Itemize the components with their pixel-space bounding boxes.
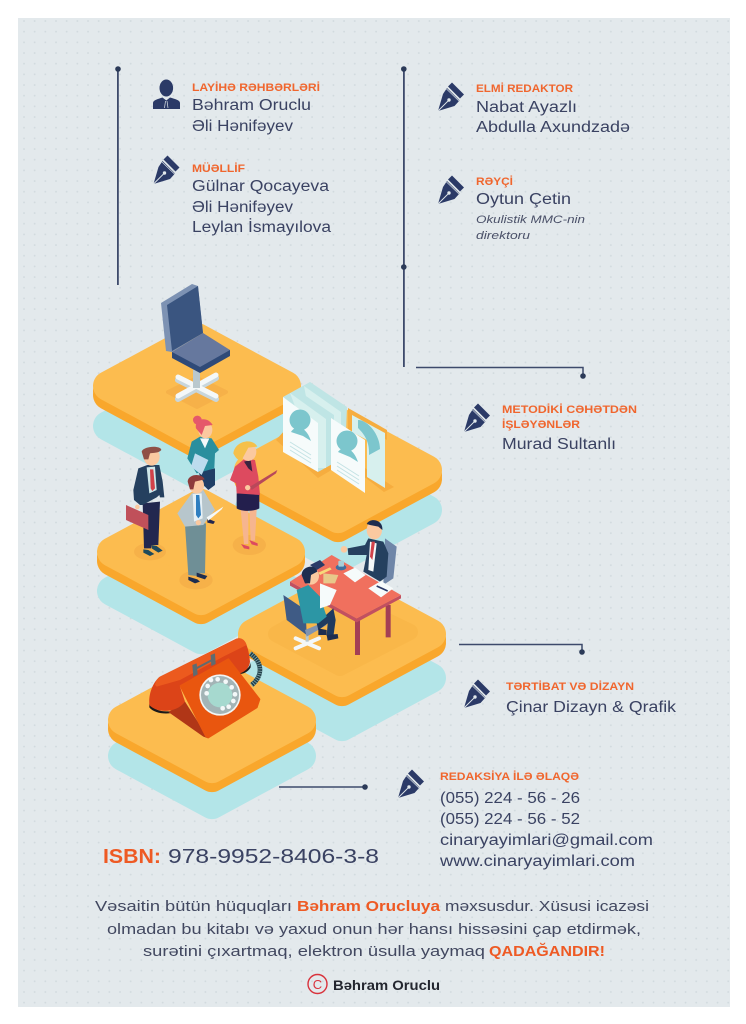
ISBN: ISBN: [103,846,161,868]
block: reviewer: RƏYÇİ [476,175,513,188]
copyright notice: olmadan bu kitabı və yaxud onun hər hansı hissəsini çap etdirmək, [107,921,641,938]
block: reviewer: Okulistik MMC-nin [476,214,585,226]
illustration: isometric platforms [108,338,431,804]
platform: telephone [123,672,301,777]
icon: pen nib author [154,156,180,184]
illustration: orange rotary telephone [149,638,260,738]
block: methodical staff: METODİKİ CƏHƏTDƏN [502,403,637,416]
icon: pen nib reviewer [438,176,464,204]
block: methodical staff: Murad Sultanlı [502,436,616,453]
block: project leaders: Bəhram Oruclu [192,97,311,114]
block: methodical staff [502,403,637,453]
copyright notice [95,898,649,960]
teal platform shadows [108,378,431,804]
ISBN [103,846,379,868]
illustration: meeting at desk [283,520,401,655]
block: reviewer: direktoru [476,230,530,242]
connector line: left column [115,66,121,285]
block: author [192,162,331,236]
table [290,555,401,655]
platform: people [112,504,290,609]
woman with folder [187,416,219,524]
block: editorial contact: (055) 224 - 56 - 52 [440,811,580,828]
copyright notice: məxsusdur. Xüsusi icazəsi [445,898,649,915]
connector line: to methodical section [416,368,586,379]
copyright notice: Vəsaitin bütün hüquqları [95,898,292,915]
icon: pen nib design [464,680,490,708]
copyright mark: C [313,977,322,992]
block: project leaders: Əli Hənifəyev [192,118,293,135]
block: author: Leylan İsmayılova [192,218,331,236]
man on right [341,520,397,585]
block: editorial contact [439,770,653,870]
block: reviewer [476,175,585,242]
woman in red [230,441,277,549]
man with tablet [177,475,223,583]
block: project leaders [192,81,320,135]
block: layout and design [506,680,676,716]
copyright notice: QADAĞANDIR! [489,942,605,960]
connector line: to design section [459,644,585,655]
platform: chair [108,338,286,443]
block: project leaders: LAYİHƏ RƏHBƏRLƏRİ [192,81,320,94]
block: scientific editor: Nabat Ayazlı [476,99,577,116]
seated man [283,567,338,648]
icon: pen nib methodical [464,404,490,432]
icon: pen nib editor [438,82,464,111]
block: editorial contact: (055) 224 - 56 - 26 [440,790,580,807]
illustration: resume documents [276,382,394,493]
block: layout and design: Çinar Dizayn & Qrafik [506,699,676,716]
illustration: office chair [161,284,230,407]
block: reviewer: Oytun Çetin [476,191,571,208]
platform: desk [253,586,431,691]
copyright mark [308,974,440,994]
block: editorial contact: www.cinaryayimlari.com [439,853,635,870]
copyright notice: Bəhram Orucluya [297,898,441,915]
connector line: middle column [401,66,407,367]
connector line: to contact section [279,784,368,790]
ISBN: 978-9952-8406-3-8 [168,846,379,868]
platform: documents [249,422,427,527]
block: methodical staff: İŞLƏYƏNLƏR [502,418,580,431]
block: scientific editor: Abdulla Axundzadə [476,119,630,136]
block: scientific editor: ELMİ REDAKTOR [476,82,573,95]
illustration: three office people and one manager [126,416,277,589]
copyright mark: Bəhram Oruclu [333,977,440,993]
icon: pen nib contact [398,770,424,798]
block: editorial contact: REDAKSİYA İLƏ ƏLAQƏ [440,770,579,783]
block: layout and design: TƏRTİBAT VƏ DİZAYN [506,680,634,693]
block: author: MÜƏLLİF [192,162,245,175]
man with briefcase [126,447,164,556]
block: author: Gülnar Qocayeva [192,178,329,195]
block: editorial contact: cinaryayimlari@gmail.com [440,832,653,849]
block: author: Əli Hənifəyev [192,199,293,216]
block: scientific editor [476,82,630,136]
icon: person [153,80,180,109]
telephone dial [199,674,241,716]
copyright notice: surətini çıxartmaq, elektron üsulla yaymaq [143,943,485,960]
